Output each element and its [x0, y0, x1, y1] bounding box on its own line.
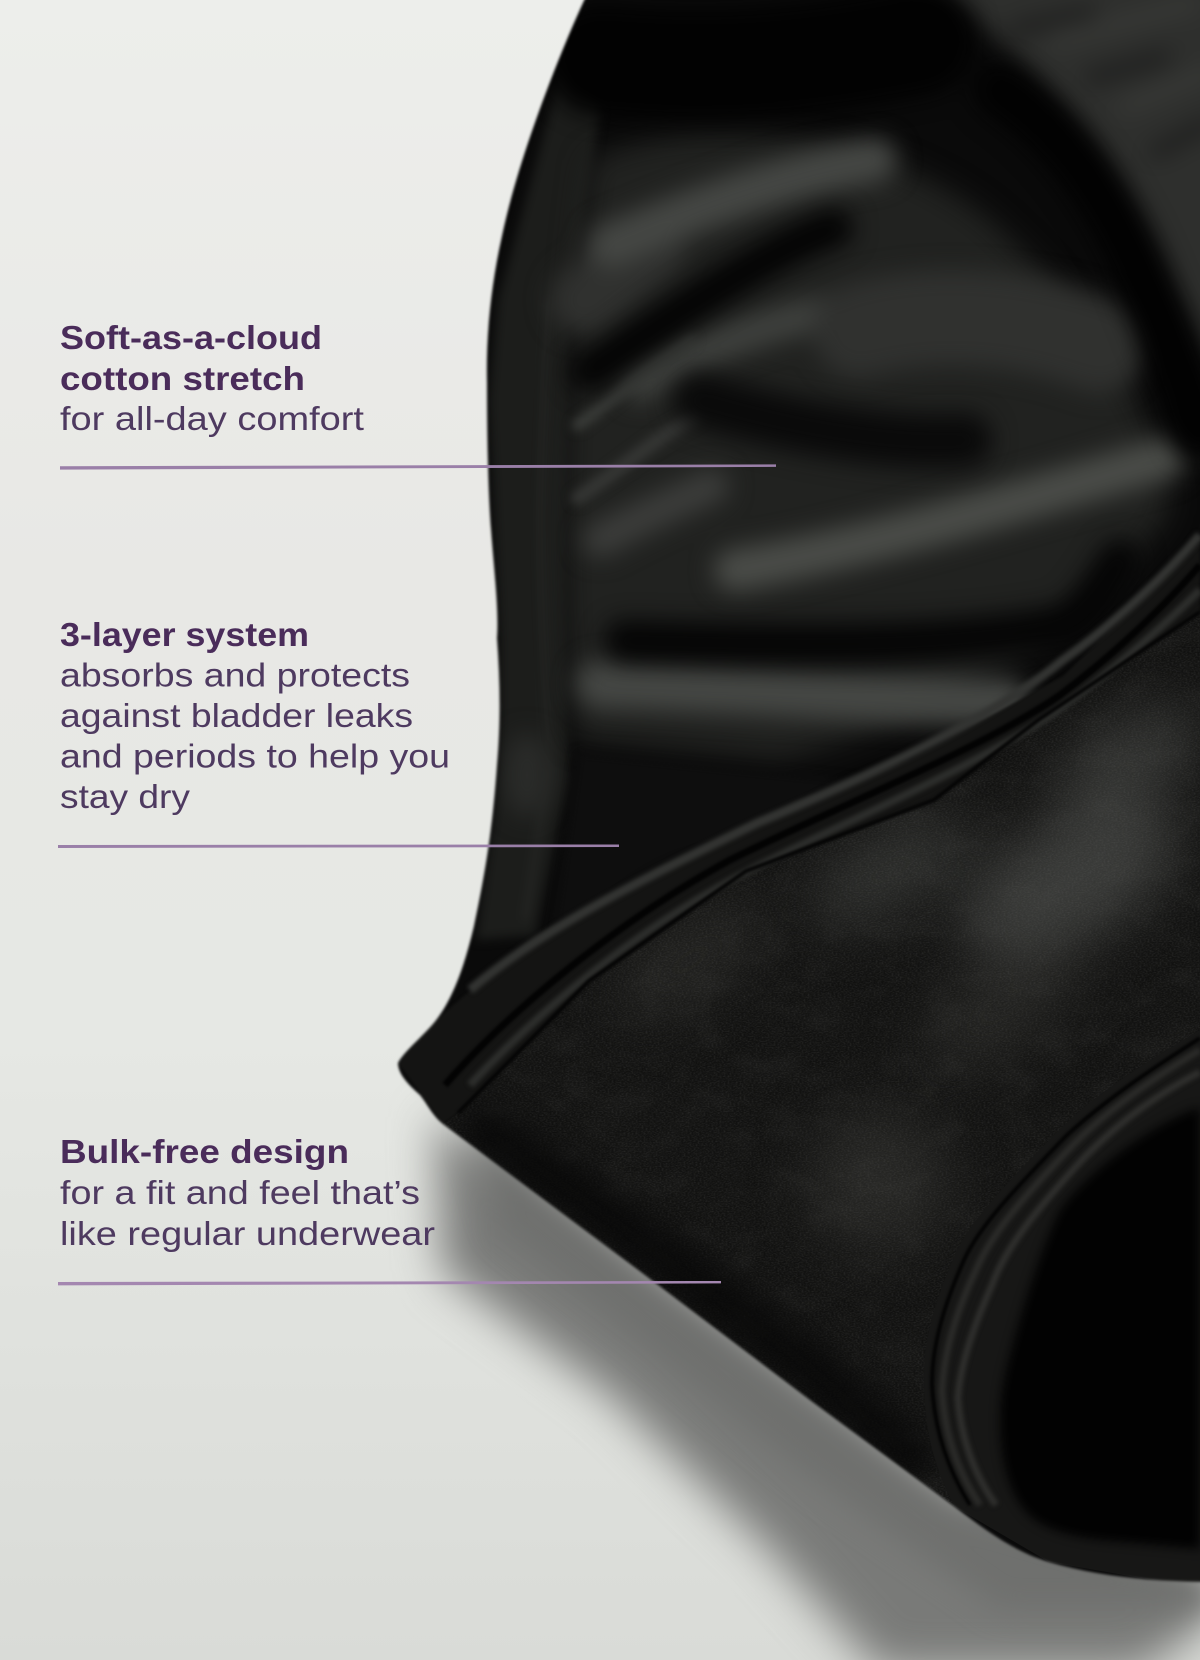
callout: bulk-free design	[58, 1133, 721, 1285]
leader line	[58, 1281, 721, 1285]
description: fit and feel: for a fit and feel that’s	[60, 1174, 420, 1211]
leader line	[60, 464, 776, 470]
garment cast shadow	[436, 1115, 1200, 1660]
description: fit and feel: like regular underwear	[60, 1215, 435, 1252]
leg opening trim	[924, 1030, 1200, 1590]
inner cloth with folds	[564, 40, 1198, 760]
description: fit and feel	[60, 1174, 435, 1252]
dark leg opening	[1000, 1107, 1200, 1549]
description: absorbs: against bladder leaks	[60, 697, 413, 734]
description: absorbs: and periods to help you	[60, 738, 450, 774]
hem stitching highlight	[500, 742, 543, 808]
dark pocket below the folds	[552, 752, 900, 935]
folded hem seam	[398, 535, 1200, 1124]
description: comfort: for all-day comfort	[60, 400, 364, 437]
callout: 3-layer system	[58, 616, 619, 848]
side hem band	[476, 40, 600, 940]
waistband, top right	[951, 0, 1200, 350]
leader line	[58, 844, 619, 848]
description: absorbs	[60, 656, 450, 815]
black underwear photo	[396, 0, 1200, 1584]
lower fabric panel	[443, 612, 1200, 1507]
description: absorbs: absorbs and protects	[60, 656, 410, 694]
callout: cotton stretch	[60, 319, 776, 470]
heading: soft-as-a-cloud: cotton stretch	[60, 360, 305, 397]
heading: 3-layer system: 3-layer system	[60, 616, 309, 653]
heading: soft-as-a-cloud: Soft-as-a-cloud	[60, 319, 322, 356]
heading: soft-as-a-cloud	[60, 319, 322, 397]
description: absorbs: stay dry	[60, 778, 191, 815]
heading: bulk-free design: Bulk-free design	[60, 1133, 349, 1170]
